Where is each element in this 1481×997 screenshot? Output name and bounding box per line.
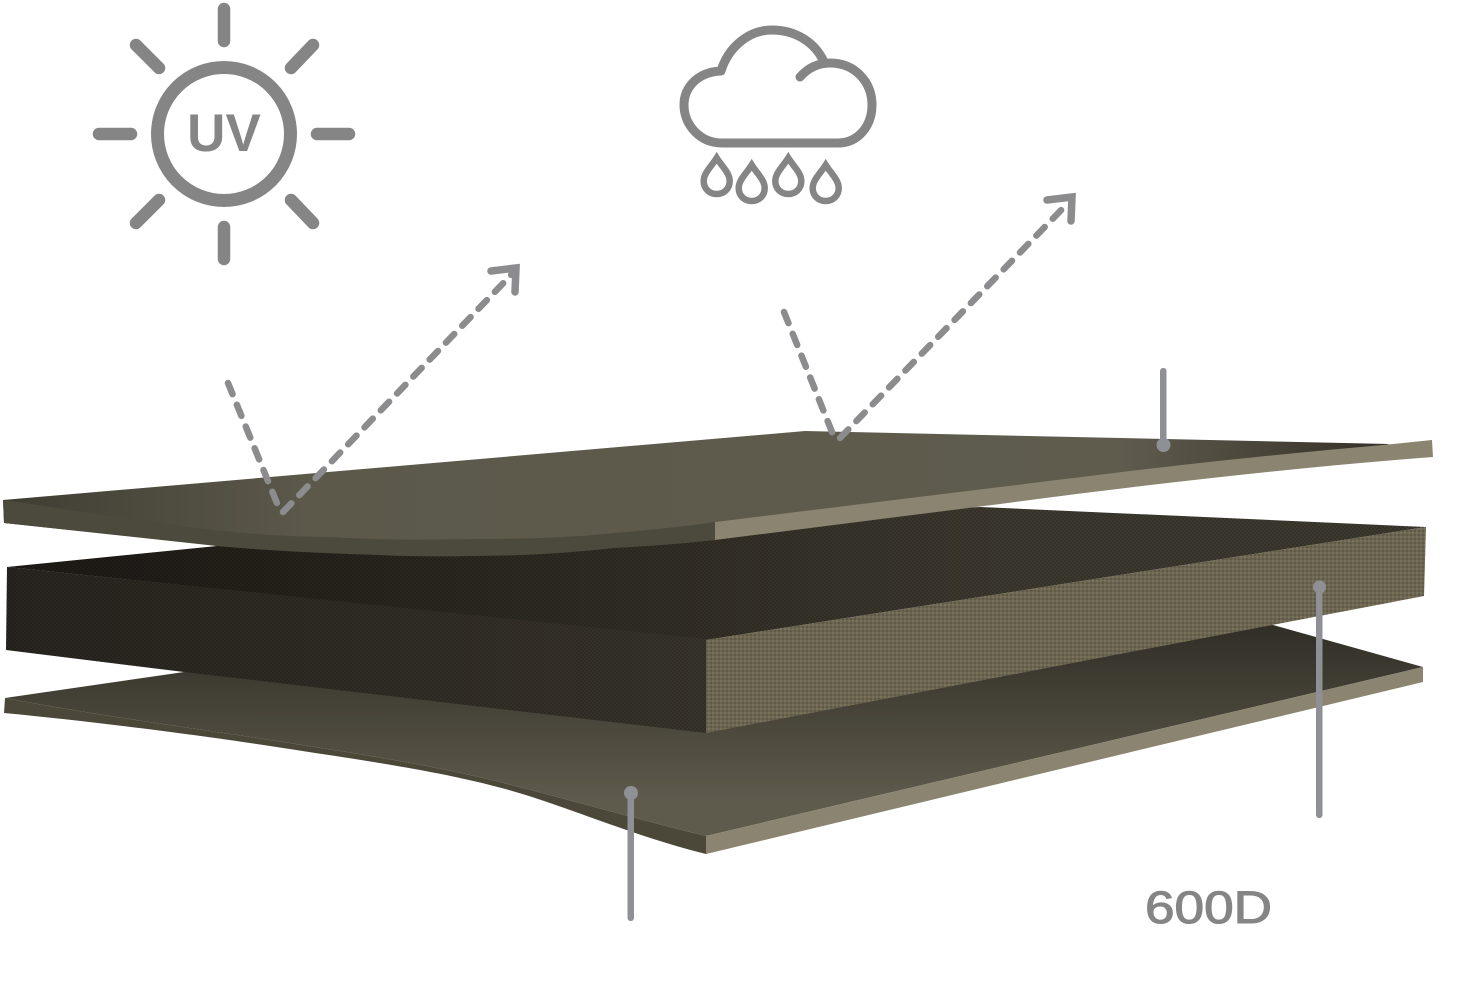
top sheet dark curved edge <box>3 500 715 556</box>
middle block right face <box>706 527 1426 733</box>
UV label: UV <box>187 104 261 163</box>
middle block top face <box>7 507 1426 640</box>
bottom sheet dark curved edge <box>4 698 706 854</box>
icon: rain cloud <box>684 30 872 201</box>
callout pin: top sheet <box>1156 368 1170 452</box>
bottom sheet light front edge <box>706 667 1423 854</box>
cloud outline <box>684 30 872 143</box>
top sheet top face <box>3 431 1389 556</box>
sun rays <box>99 9 349 259</box>
woven texture on the right face <box>706 527 1426 733</box>
fabric layer: thick middle 600D block <box>6 507 1426 733</box>
callout pin: bottom sheet <box>624 786 638 921</box>
callout pin: middle block <box>1313 580 1326 818</box>
rain drops <box>704 158 839 201</box>
middle block left face <box>6 567 706 733</box>
top sheet light front edge <box>715 440 1433 540</box>
arrow: UV ray reflected off the top sheet <box>228 268 516 513</box>
woven texture on the top and left faces <box>6 507 1426 733</box>
bottom sheet top face <box>5 625 1423 836</box>
fabric layer: bottom sheet <box>4 625 1423 854</box>
arrow: rain deflected off the top sheet <box>784 197 1072 442</box>
fabric layer: top sheet <box>3 431 1433 556</box>
sun ring <box>158 68 290 200</box>
label: 600D: 600D <box>1145 882 1272 933</box>
icon: UV sun <box>99 9 349 259</box>
